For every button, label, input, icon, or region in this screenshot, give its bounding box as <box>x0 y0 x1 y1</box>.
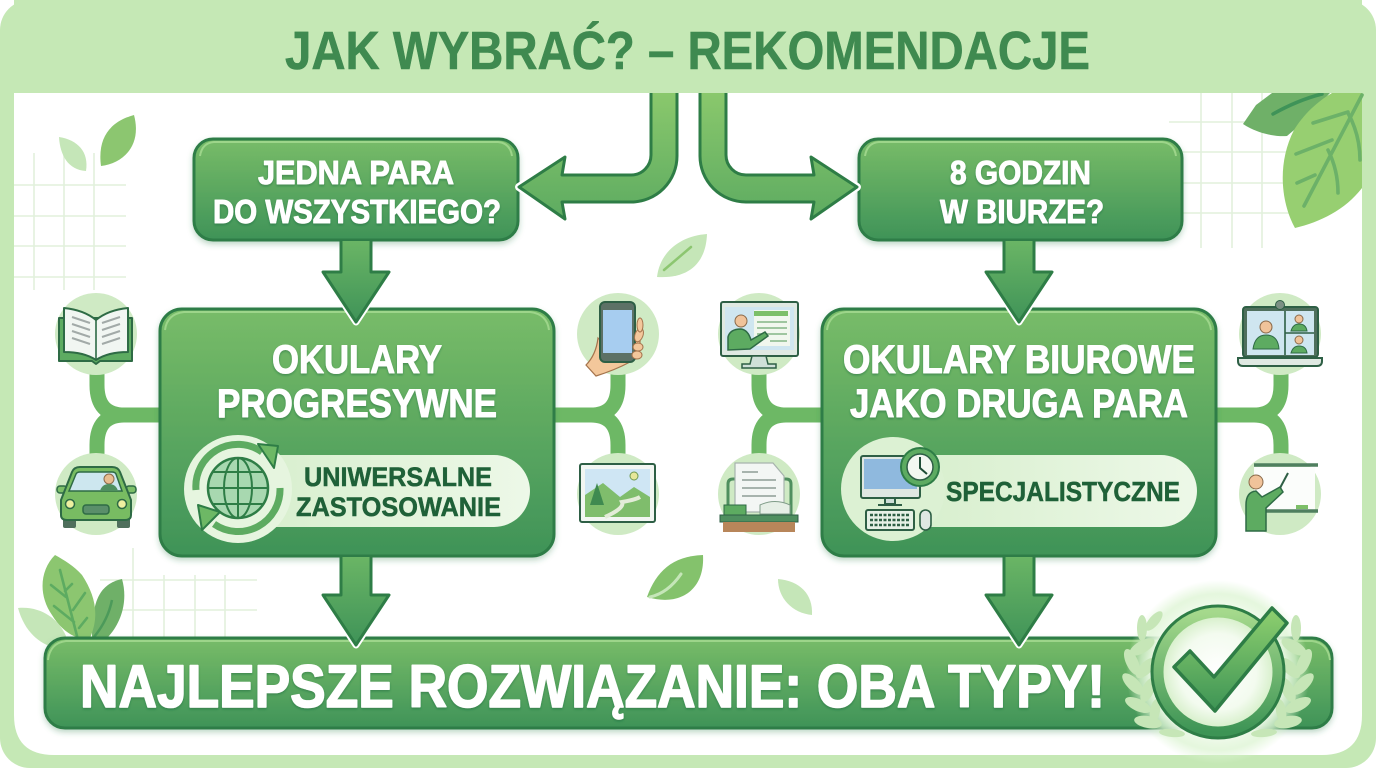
icon: open book <box>55 293 137 375</box>
icon: computer and clock <box>841 437 945 541</box>
question box: one pair <box>194 139 518 240</box>
badge: universal use: UNIWERSALNE <box>304 462 492 492</box>
icon: presentation on monitor <box>718 293 800 375</box>
decorative leaf: centre bottom pale <box>778 579 812 615</box>
arrow: to left question <box>519 93 677 219</box>
main panel: progressive lenses <box>160 309 554 556</box>
decorative leaves: bottom left <box>18 555 124 648</box>
heading: OKULARY BIUROWE <box>843 338 1195 382</box>
connectors: right options <box>759 370 1281 460</box>
icon: globe with arrows <box>184 435 292 543</box>
arrow: down to progressive panel <box>323 241 389 322</box>
heading: PROGRESYWNE <box>217 382 497 426</box>
badge: universal use: ZASTOSOWANIE <box>296 492 501 522</box>
heading <box>217 338 497 426</box>
banner: best solution <box>45 638 1332 728</box>
decorative leaf: centre bottom <box>647 555 703 600</box>
question box: 8 hours: W BIURZE? <box>940 193 1104 230</box>
icon: landscape picture <box>577 453 659 535</box>
heading: JAKO DRUGA PARA <box>850 382 1188 426</box>
icon: phone in hand <box>577 293 659 376</box>
arrow: to right question <box>700 93 857 219</box>
heading: OKULARY <box>272 338 442 382</box>
icon: documents on desk <box>718 453 800 535</box>
question box: one pair: DO WSZYSTKIEGO? <box>213 193 501 230</box>
header band <box>14 0 1362 93</box>
badge: specialised: SPECJALISTYCZNE <box>946 476 1180 507</box>
icon: video call laptop <box>1238 293 1322 375</box>
arrow: down to office panel <box>986 241 1052 322</box>
title: JAK WYBRAĆ? – REKOMENDACJE <box>285 21 1090 81</box>
question box: one pair: JEDNA PARA <box>258 154 454 191</box>
question box: 8 hours: 8 GODZIN <box>950 154 1091 191</box>
decorative leaves: top left <box>59 115 136 171</box>
badge: specialised <box>841 437 1197 541</box>
icon: teacher at whiteboard <box>1239 453 1321 535</box>
main panel: office lenses <box>822 309 1216 556</box>
icon: car <box>55 453 137 535</box>
banner: best solution: NAJLEPSZE ROZWIĄZANIE: OBA TYPY! <box>80 653 1105 720</box>
arrow: office to banner <box>986 557 1052 645</box>
icon: check mark badge with laurels <box>1119 580 1317 764</box>
badge: universal use <box>184 435 530 543</box>
decorative leaves: top right <box>1243 93 1362 228</box>
connectors: left options <box>97 370 618 460</box>
decorative leaf: centre top <box>657 234 707 277</box>
heading <box>843 338 1195 426</box>
question box: 8 hours <box>859 139 1182 240</box>
arrow: progressive to banner <box>323 557 389 645</box>
